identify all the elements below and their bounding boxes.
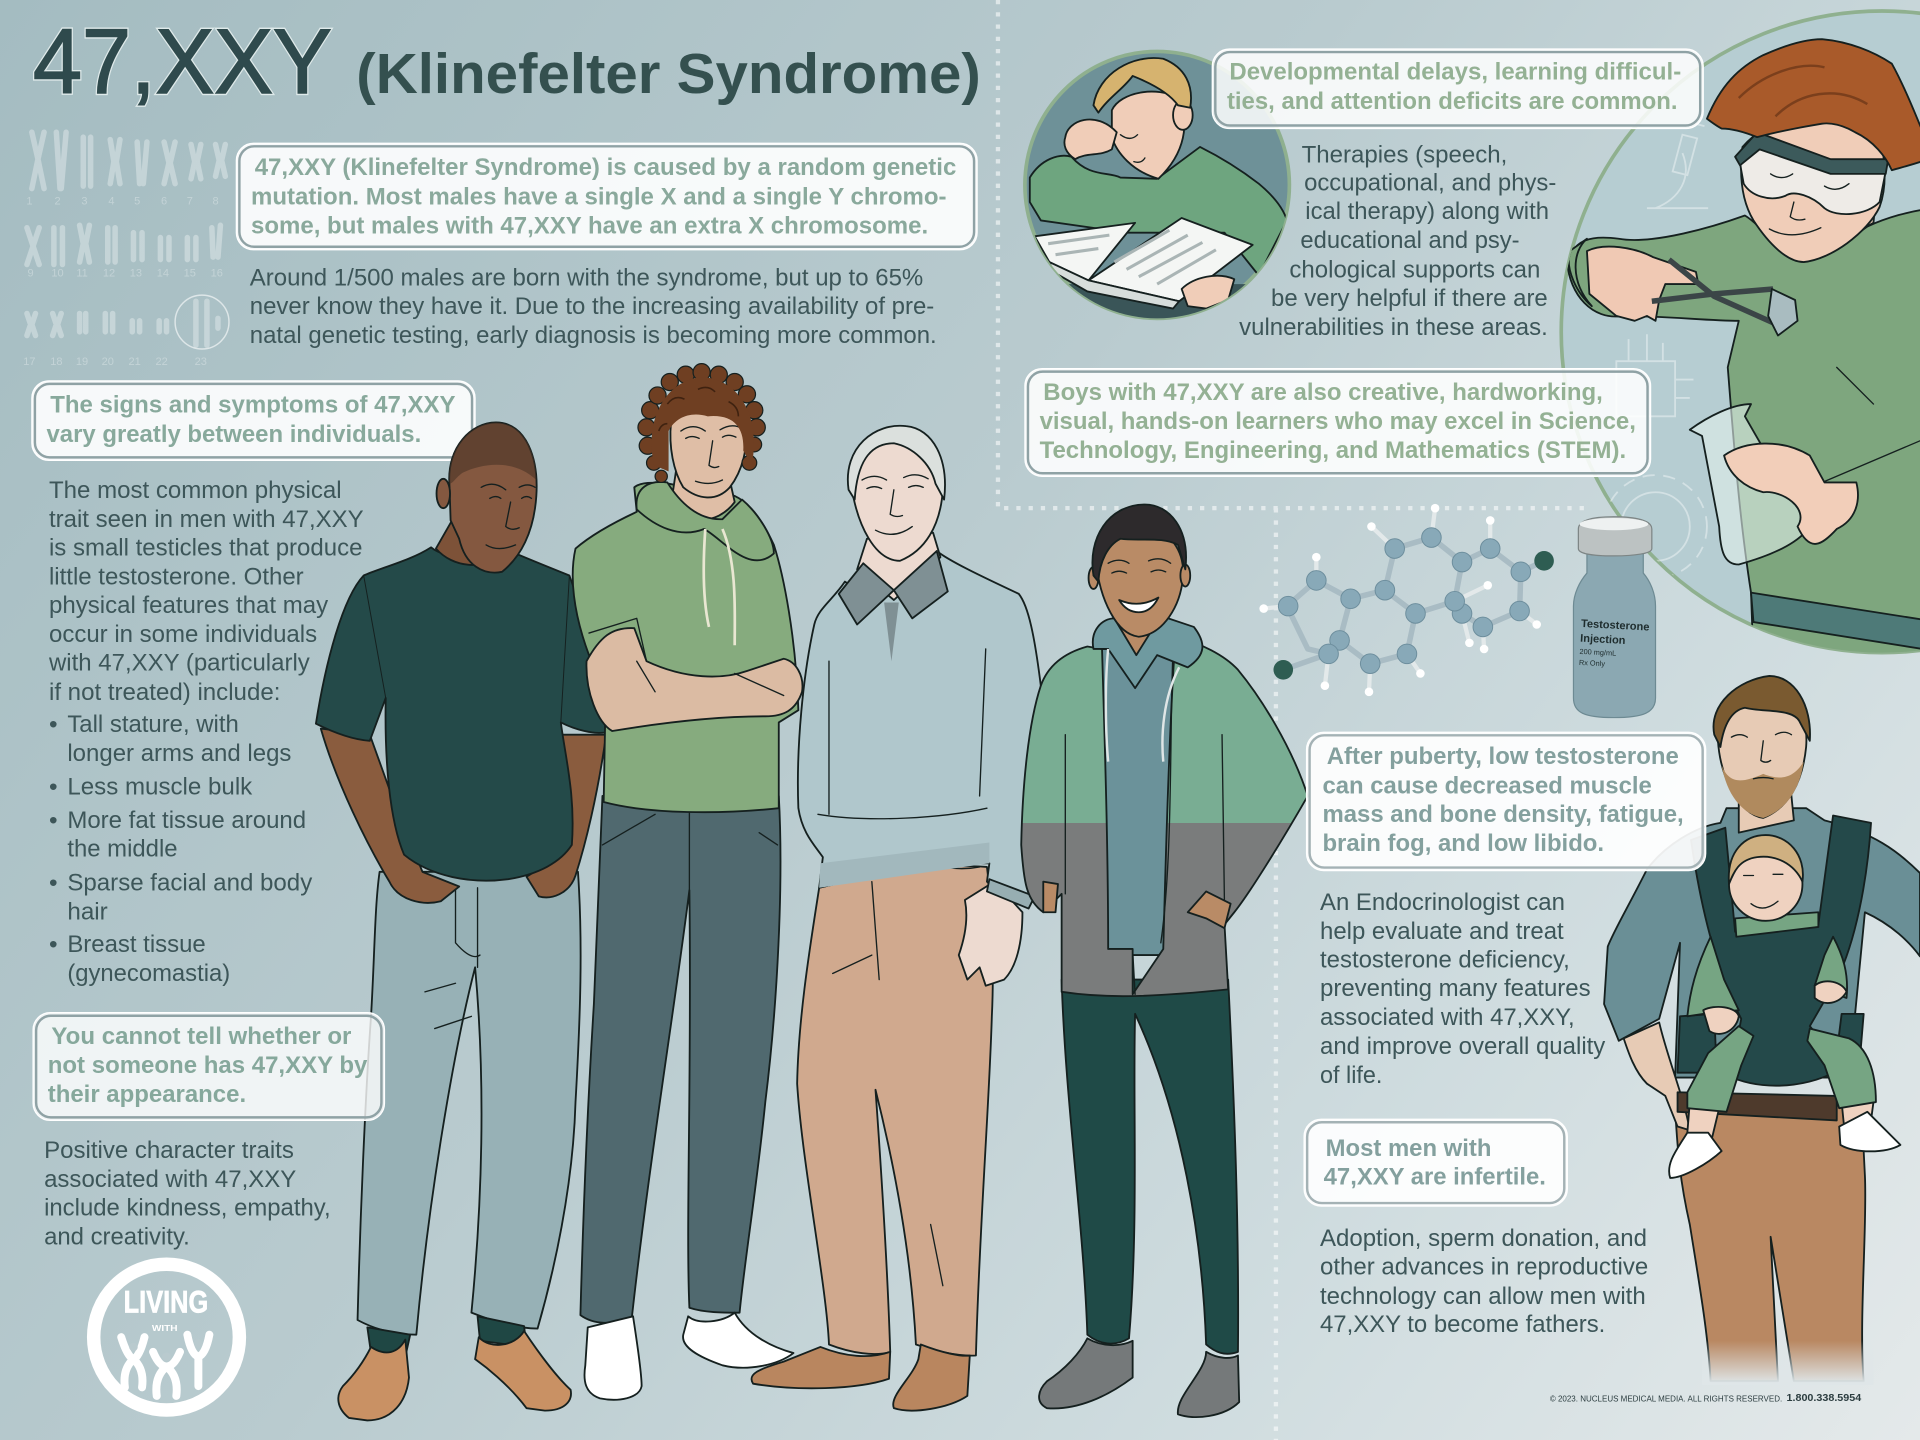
panel: science circle with scientist bbox=[1561, 11, 1920, 661]
callout: after puberty bbox=[1307, 732, 1706, 871]
text: physical features: Tall stature, with bbox=[67, 711, 239, 738]
hair bbox=[1707, 39, 1920, 170]
jeans bbox=[358, 872, 581, 1335]
boy lower hand bbox=[1182, 276, 1234, 309]
callout: cause: some, but males with 47,XXY have an extra X chromosome. bbox=[251, 213, 928, 240]
title: 47,XXY bbox=[33, 11, 332, 113]
karyotype chart: 15 bbox=[184, 268, 196, 280]
head bbox=[449, 422, 537, 573]
callout: signs and symptoms: The signs and symptoms of 47,XXY bbox=[50, 392, 456, 419]
father hair bbox=[1713, 676, 1810, 747]
socks bbox=[367, 1316, 527, 1357]
boy face bbox=[1112, 92, 1184, 179]
text: therapies: chological supports can bbox=[1289, 256, 1540, 283]
hand bbox=[959, 882, 1022, 986]
left hand bbox=[1043, 882, 1058, 912]
baby shoes bbox=[1669, 1112, 1900, 1178]
vial label: Testosterone bbox=[1581, 618, 1650, 634]
belt bbox=[1678, 1092, 1837, 1120]
facial features bbox=[481, 484, 535, 549]
karyotype chart: 23 bbox=[195, 356, 207, 368]
baby sleeves and legs bbox=[1687, 937, 1876, 1112]
text: physical features: if not treated) include: bbox=[49, 679, 280, 706]
karyotype chart: 10 bbox=[51, 268, 64, 280]
text: endocrinologist: help evaluate and treat bbox=[1320, 918, 1564, 945]
callout: cause: 47,XXY (Klinefelter Syndrome) is caused by a random genetic bbox=[255, 154, 956, 181]
callout: STEM bbox=[1025, 369, 1651, 476]
hood bbox=[636, 482, 774, 560]
text: therapies: vulnerabilities in these areas. bbox=[1239, 314, 1548, 341]
text: endocrinologist bbox=[1320, 889, 1606, 1089]
beaker hand bbox=[1724, 444, 1858, 544]
crossed arms bbox=[586, 628, 802, 731]
karyotype chart: 7 bbox=[187, 195, 193, 207]
karyotype chart bbox=[23, 132, 229, 368]
title: 47,XXY bbox=[33, 11, 332, 113]
text: endocrinologist: preventing many features bbox=[1320, 975, 1591, 1002]
cuff bbox=[987, 879, 1035, 909]
text: endocrinologist: associated with 47,XXY, bbox=[1320, 1004, 1575, 1031]
karyotype chart: 12 bbox=[103, 268, 115, 280]
dark trousers bbox=[1062, 980, 1238, 1354]
black hair bbox=[1092, 504, 1186, 582]
callout: STEM: Boys with 47,XXY are also creative, hardworking, bbox=[1043, 379, 1603, 406]
text: prevalence: natal genetic testing, early diagnosis is becoming more common. bbox=[250, 322, 937, 349]
father neck bbox=[1739, 784, 1794, 833]
text: therapies: ical therapy) along with bbox=[1305, 198, 1549, 225]
callout: after puberty: After puberty, low testosterone bbox=[1327, 743, 1679, 770]
neck bbox=[671, 471, 735, 520]
karyotype chart: 18 bbox=[50, 356, 62, 368]
text: physical features: More fat tissue around bbox=[67, 807, 306, 834]
text: fatherhood: 47,XXY to become fathers. bbox=[1320, 1311, 1605, 1338]
callout: appearance: their appearance. bbox=[48, 1081, 246, 1108]
callout: after puberty: can cause decreased muscle bbox=[1322, 772, 1652, 799]
beaker bbox=[1690, 404, 1810, 564]
figure: father carrying baby bbox=[1604, 676, 1920, 1385]
baby hands bbox=[1703, 981, 1847, 1034]
callout: developmental delays: ties, and attention deficits are common. bbox=[1227, 88, 1678, 115]
table bbox=[1068, 284, 1246, 318]
figure: man in green hoodie bbox=[573, 364, 802, 1400]
text: therapies: be very helpful if there are bbox=[1271, 285, 1548, 312]
text: character traits: Positive character traits bbox=[44, 1137, 294, 1164]
vial label: Rx Only bbox=[1579, 658, 1606, 668]
goggles bbox=[1739, 147, 1886, 214]
karyotype chart: 9 bbox=[28, 268, 34, 280]
text: physical features: • bbox=[49, 711, 58, 738]
callout: infertility: Most men with bbox=[1326, 1135, 1491, 1162]
teal T-shirt bbox=[1096, 649, 1182, 955]
text: fatherhood bbox=[1320, 1225, 1648, 1338]
karyotype chart: 13 bbox=[130, 268, 142, 280]
callout: signs and symptoms: vary greatly between individuals. bbox=[47, 421, 421, 448]
hand on hip bbox=[1624, 1022, 1690, 1130]
text: fatherhood: technology can allow men with bbox=[1320, 1283, 1646, 1310]
boy sweater bbox=[1030, 147, 1287, 276]
text: physical features: is small testicles that produce bbox=[49, 535, 362, 562]
smile bbox=[1119, 598, 1158, 612]
text: physical features: physical features that may bbox=[49, 592, 329, 619]
vial label: 200 mg/mL bbox=[1579, 647, 1616, 658]
head bbox=[851, 431, 943, 561]
text: physical features: trait seen in men with 47,XXY bbox=[49, 506, 364, 533]
baby head bbox=[1729, 847, 1802, 921]
text: endocrinologist: and improve overall quality bbox=[1320, 1033, 1606, 1060]
text: fatherhood: Adoption, sperm donation, and bbox=[1320, 1225, 1647, 1252]
text: physical features: hair bbox=[67, 899, 108, 926]
face bbox=[1741, 112, 1885, 262]
sweater hem ribbing bbox=[819, 842, 989, 888]
sweater bbox=[798, 551, 1042, 897]
karyotype chart: 17 bbox=[23, 356, 36, 368]
arms and hands bbox=[321, 729, 606, 903]
scientist sweater bbox=[1567, 208, 1920, 661]
callout: STEM: Technology, Engineering, and Mathematics (STEM). bbox=[1040, 437, 1626, 464]
karyotype chart: 22 bbox=[155, 356, 168, 368]
callout: infertility: 47,XXY are infertile. bbox=[1324, 1164, 1546, 1191]
text: physical features bbox=[48, 477, 364, 987]
callout: STEM: visual, hands-on learners who may excel in Science, bbox=[1040, 408, 1636, 435]
curly hair bbox=[638, 364, 765, 482]
panel: boy reading circle bbox=[1025, 51, 1289, 321]
karyotype chart: 2 bbox=[54, 195, 61, 207]
neck bbox=[1112, 612, 1166, 671]
callout: appearance: You cannot tell whether or bbox=[51, 1023, 352, 1050]
karyotype chart: 8 bbox=[212, 195, 219, 207]
text: therapies: educational and psy- bbox=[1300, 227, 1520, 254]
text: therapies: Therapies (speech, bbox=[1302, 141, 1507, 168]
text: physical features: little testosterone. Other bbox=[49, 563, 304, 590]
figure: teen in color-block jacket bbox=[1021, 504, 1308, 1417]
neck bbox=[1804, 216, 1875, 263]
text: fatherhood: other advances in reproductive bbox=[1320, 1254, 1648, 1281]
baby shins bbox=[1687, 1102, 1873, 1139]
beard bbox=[1722, 762, 1804, 818]
jacket bbox=[1021, 637, 1308, 996]
text: physical features: The most common physical bbox=[49, 477, 342, 504]
callout: cause: mutation. Most males have a single X and a single Y chromo- bbox=[251, 183, 947, 210]
text: character traits: and creativity. bbox=[44, 1223, 190, 1250]
text: prevalence bbox=[250, 264, 937, 349]
gray shoes bbox=[1039, 1338, 1239, 1417]
text: physical features: occur in some individuals bbox=[49, 621, 317, 648]
shirt bbox=[1604, 808, 1920, 1078]
text: physical features: (gynecomastia) bbox=[67, 960, 230, 987]
callout: developmental delays bbox=[1212, 49, 1703, 129]
karyotype chart: 3 bbox=[81, 195, 88, 207]
neck bbox=[436, 514, 504, 565]
short hair bbox=[449, 422, 536, 484]
copyright: 1.800.338.5954 bbox=[1787, 1393, 1861, 1404]
open book bbox=[1035, 218, 1253, 301]
text: therapies: occupational, and phys- bbox=[1304, 170, 1556, 197]
karyotype chart: 16 bbox=[211, 268, 223, 280]
text: physical features: • bbox=[49, 807, 58, 834]
neck bbox=[857, 533, 940, 600]
boy hand bbox=[1064, 120, 1117, 159]
T-shirt bbox=[316, 545, 606, 881]
white hair bbox=[848, 426, 945, 500]
figure: man in dark green T-shirt bbox=[316, 422, 606, 1420]
drawstrings bbox=[704, 529, 735, 645]
carrier bbox=[1691, 816, 1871, 1086]
logo: Living with XXY: LIVING bbox=[124, 1284, 208, 1320]
hand with tongs bbox=[1587, 247, 1698, 321]
cuff bbox=[1569, 239, 1592, 306]
karyotype chart: 21 bbox=[129, 356, 141, 368]
karyotype chart: 4 bbox=[108, 195, 114, 207]
right hand bbox=[1188, 891, 1231, 928]
text: endocrinologist: An Endocrinologist can bbox=[1320, 889, 1565, 916]
callout: after puberty: brain fog, and low libido. bbox=[1322, 830, 1604, 857]
text: prevalence: never know they have it. Due to the increasing availability of pre- bbox=[250, 293, 934, 320]
text: therapies bbox=[1239, 141, 1556, 341]
text: endocrinologist: of life. bbox=[1320, 1062, 1382, 1089]
callout: after puberty: mass and bone density, fatigue, bbox=[1322, 801, 1684, 828]
callout: signs and symptoms bbox=[32, 381, 475, 460]
text: physical features: • bbox=[49, 870, 58, 897]
logo: Living with XXY: WITH bbox=[152, 1323, 178, 1333]
karyotype chart: 1 bbox=[26, 195, 32, 207]
logo: Living with XXY bbox=[94, 1264, 239, 1410]
title: (Klinefelter Syndrome) bbox=[356, 42, 981, 105]
callout: cause bbox=[236, 143, 977, 250]
pants bbox=[580, 796, 780, 1323]
trousers bbox=[1675, 1102, 1865, 1381]
text: physical features: longer arms and legs bbox=[67, 740, 291, 767]
text: physical features: • bbox=[49, 774, 58, 801]
text: physical features: Breast tissue bbox=[67, 931, 206, 958]
carrier back straps bbox=[1678, 1014, 1864, 1073]
copyright: © 2023. NUCLEUS MEDICAL MEDIA. ALL RIGHTS RESERVED. bbox=[1550, 1393, 1782, 1403]
molecule model bbox=[1259, 504, 1554, 696]
father head bbox=[1718, 692, 1806, 818]
callout: appearance: not someone has 47,XXY by bbox=[48, 1052, 368, 1079]
karyotype chart: 14 bbox=[157, 268, 169, 280]
vial label: Injection bbox=[1580, 633, 1626, 647]
title bbox=[33, 11, 981, 113]
text: physical features: Sparse facial and body bbox=[67, 870, 313, 897]
text: character traits: associated with 47,XXY bbox=[44, 1166, 296, 1193]
karyotype chart: 5 bbox=[134, 195, 140, 207]
text: physical features: with 47,XXY (particularly bbox=[48, 650, 311, 677]
tan trousers bbox=[797, 866, 993, 1356]
icons: microscope, circuit and gear bbox=[1604, 122, 1708, 578]
callout: developmental delays: Developmental delays, learning difficul- bbox=[1229, 59, 1681, 86]
orange shoes bbox=[338, 1331, 571, 1420]
text: prevalence: Around 1/500 males are born with the syndrome, but up to 65% bbox=[250, 264, 923, 291]
karyotype chart: 11 bbox=[76, 268, 88, 280]
hoodie bbox=[573, 483, 798, 812]
text: physical features: Less muscle bulk bbox=[67, 774, 253, 801]
vial label bbox=[1579, 618, 1650, 670]
callout: appearance bbox=[33, 1013, 384, 1120]
tong sample bbox=[1768, 289, 1798, 336]
callout: infertility bbox=[1304, 1119, 1567, 1206]
collar bbox=[839, 551, 948, 624]
boy hair bbox=[1093, 58, 1191, 113]
text: character traits: include kindness, empathy, bbox=[44, 1195, 331, 1222]
karyotype chart: 19 bbox=[76, 356, 88, 368]
sweater hem band bbox=[1751, 593, 1920, 649]
text: physical features: • bbox=[49, 931, 58, 958]
brown shoes bbox=[752, 1344, 970, 1411]
figure: older man in light sweater bbox=[752, 426, 1042, 1411]
karyotype chart: 20 bbox=[102, 356, 114, 368]
text: character traits bbox=[44, 1137, 331, 1250]
white shoes bbox=[584, 1313, 793, 1400]
head bbox=[1096, 527, 1183, 637]
hood and strings bbox=[1093, 616, 1202, 688]
text: physical features: the middle bbox=[67, 836, 178, 863]
testosterone vial bbox=[1573, 517, 1656, 718]
karyotype chart: 6 bbox=[161, 195, 167, 207]
text: endocrinologist: testosterone deficiency, bbox=[1320, 946, 1570, 973]
face bbox=[670, 404, 746, 497]
